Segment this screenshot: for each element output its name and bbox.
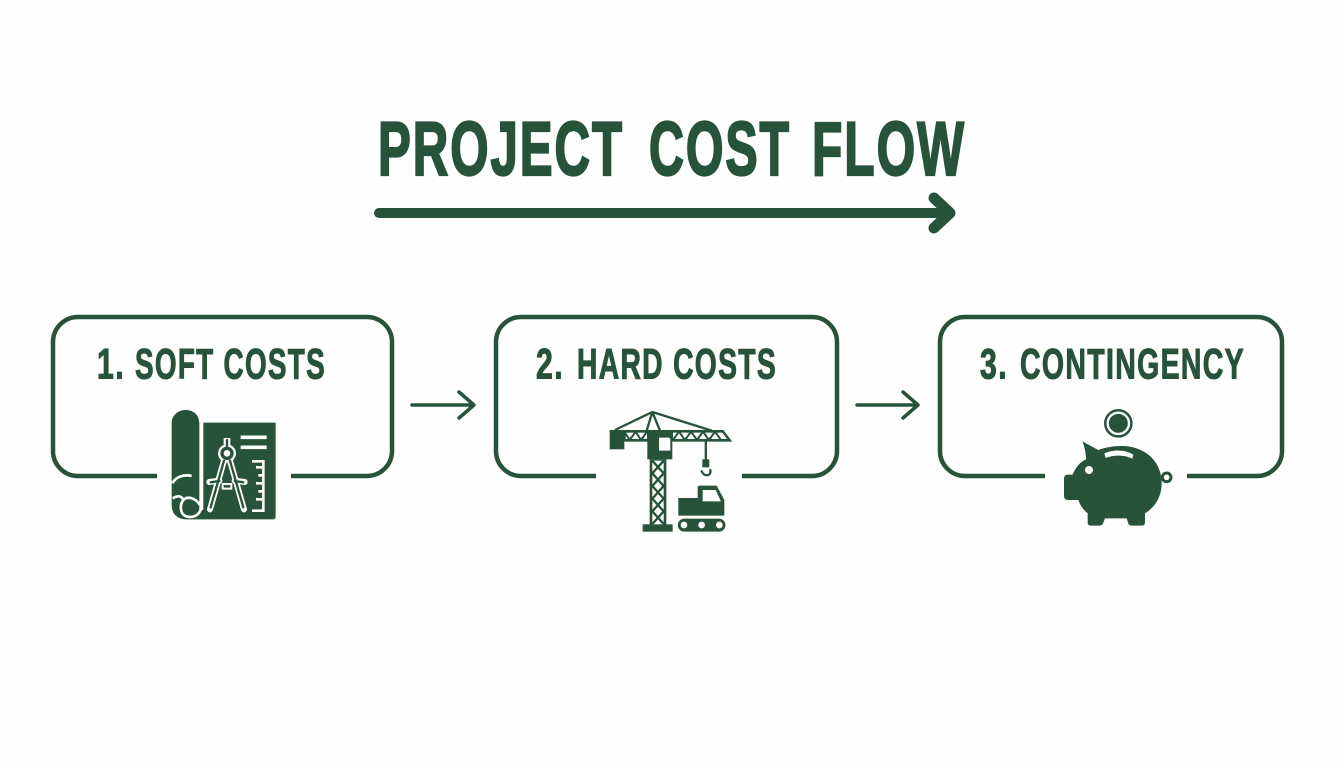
arrow: main flow xyxy=(379,198,950,228)
panel: contingency xyxy=(940,317,1282,526)
panel: hard costs xyxy=(496,317,837,532)
panel: soft costs xyxy=(53,317,392,519)
heading: soft costs: SOFT COSTS xyxy=(135,340,326,388)
heading: contingency xyxy=(980,340,1245,388)
heading: soft costs xyxy=(97,340,326,388)
title: FLOW xyxy=(812,107,966,192)
arrow: soft to hard xyxy=(412,392,474,418)
heading: contingency: 3. xyxy=(980,340,1008,388)
heading: soft costs: 1. xyxy=(97,340,125,388)
heading: hard costs: 2. xyxy=(536,340,564,388)
icon: crane and crawler vehicle xyxy=(610,412,732,532)
title: COST xyxy=(649,107,791,192)
heading: hard costs: HARD COSTS xyxy=(577,340,777,388)
icon: piggy bank and coin xyxy=(1064,409,1171,526)
icon: blueprint and compass xyxy=(172,410,276,519)
title xyxy=(378,107,966,192)
arrow: hard to contingency xyxy=(857,392,918,418)
heading: hard costs xyxy=(536,340,777,388)
title: PROJECT xyxy=(378,107,624,192)
